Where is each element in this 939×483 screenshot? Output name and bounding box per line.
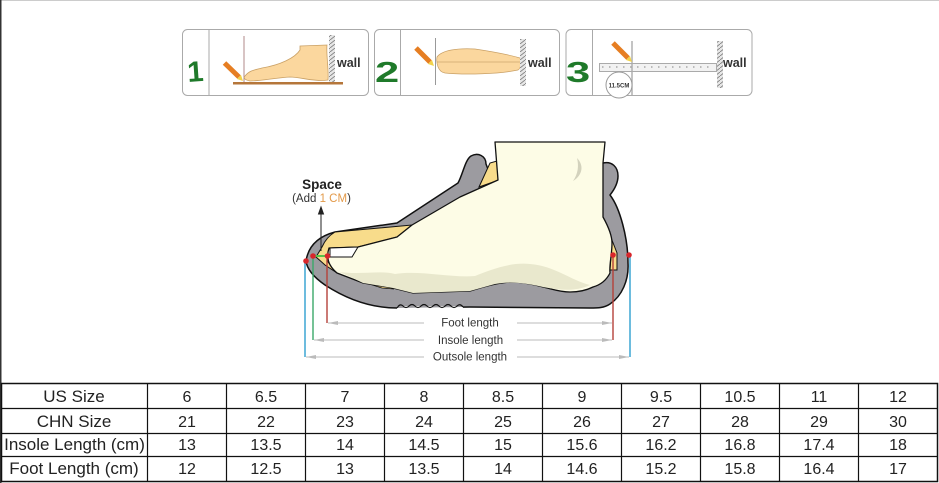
dimension: foot length: [328, 318, 612, 330]
dimension: insole length: Insole length: [438, 335, 503, 347]
row: US Size: 7: [341, 389, 350, 406]
icon: ruler: [600, 64, 716, 72]
row: Foot Length: 16.4: [803, 461, 835, 478]
dimension: outsole length: Outsole length: [433, 352, 507, 364]
row: US Size: 9: [578, 389, 587, 406]
row: Foot Length: 14: [494, 461, 512, 478]
row: CHN Size: 22: [257, 414, 275, 431]
row: CHN Size: 29: [810, 414, 828, 431]
row: US Size: 6: [183, 389, 192, 406]
row: US Size: 11: [811, 389, 827, 406]
label: wall: wall: [722, 56, 747, 70]
step number 1: 1: [186, 56, 205, 89]
size table: [1, 383, 938, 482]
row: US Size: 10.5: [724, 389, 756, 406]
row: Insole Length: Insole Length (cm): [4, 435, 145, 454]
row: Insole Length: 16.2: [645, 437, 677, 454]
step number 2: 2: [375, 56, 399, 88]
icon: wall hatch: [717, 41, 723, 88]
row: Foot Length: 15.8: [724, 461, 756, 478]
row: US Size: US Size: [43, 387, 105, 406]
row: Insole Length: 14: [336, 437, 354, 454]
yellow insole ball sliver: [366, 282, 394, 289]
row: US Size: 6.5: [255, 389, 277, 406]
ankle bone mark: [573, 158, 582, 181]
tongue padding: [479, 161, 499, 187]
label: Space: Space: [302, 177, 342, 192]
row: CHN Size: 26: [573, 414, 591, 431]
icon: top view foot: [437, 49, 521, 74]
label: Add 1 CM: (Add 1 CM): [292, 193, 351, 205]
row: CHN Size: 28: [731, 414, 749, 431]
row: CHN Size: CHN Size: [37, 412, 111, 431]
dimension: foot length: Foot length: [441, 318, 499, 330]
row: Foot Length: 13: [336, 461, 354, 478]
row: Foot Length: 14.6: [566, 461, 598, 478]
row: CHN Size: 24: [415, 414, 433, 431]
row: US Size: 12: [889, 389, 907, 406]
row: Foot Length: 17: [889, 461, 907, 478]
row: Insole Length: 16.8: [724, 437, 756, 454]
row: CHN Size: 27: [652, 414, 670, 431]
label: wall: wall: [336, 56, 361, 70]
row: Foot Length: Foot Length (cm): [9, 459, 139, 478]
shoe sole and upper: [306, 154, 628, 308]
heel padding: [603, 217, 617, 270]
row: CHN Size: 25: [494, 414, 512, 431]
row: US Size: 8: [420, 389, 429, 406]
row: CHN Size: 21: [178, 414, 196, 431]
step number 3: 3: [566, 56, 590, 88]
callout: 11.5CM: [606, 72, 632, 98]
panel: step 3 measure with ruler: [566, 30, 752, 98]
icon: pencil: [613, 43, 632, 62]
yellow insole: [316, 225, 412, 273]
dimension: outsole length: [306, 352, 629, 364]
foot: [328, 142, 612, 293]
sole shading: [340, 264, 590, 293]
panel: step 1 measure heel against wall: [182, 30, 368, 96]
diagram: foot inside shoe: [303, 142, 632, 357]
row: Insole Length: 18: [889, 437, 907, 454]
row: CHN Size: 30: [889, 414, 907, 431]
row: US Size: 8.5: [492, 389, 514, 406]
measurement lines: [305, 256, 630, 357]
space arrow: [318, 207, 324, 251]
row: Foot Length: 12.5: [250, 461, 282, 478]
panel: step 2 mark toe from above: [374, 30, 560, 96]
callout: 11.5CM: 11.5CM: [609, 84, 629, 90]
dimension: insole length: [314, 335, 612, 347]
row: Foot Length: 13.5: [408, 461, 440, 478]
row: Insole Length: 13: [178, 437, 196, 454]
icon: pencil: [224, 63, 243, 81]
row: CHN Size: 23: [336, 414, 354, 431]
icon: side view foot: [244, 45, 328, 81]
row: Insole Length: 15.6: [566, 437, 598, 454]
icon: wall hatch: [520, 39, 526, 86]
icon: pencil: [416, 48, 434, 66]
row: Insole Length: 14.5: [408, 437, 440, 454]
big toe gap: [330, 247, 358, 257]
tread notches: [397, 304, 463, 312]
row: Foot Length: 12: [178, 461, 196, 478]
measure points: [303, 252, 632, 264]
row: Foot Length: 15.2: [645, 461, 677, 478]
row: US Size: 9.5: [650, 389, 672, 406]
row: Insole Length: 13.5: [250, 437, 282, 454]
row: Insole Length: 17.4: [803, 437, 835, 454]
label: wall: wall: [527, 56, 552, 70]
icon: wall hatch: [329, 35, 335, 83]
row: Insole Length: 15: [494, 437, 512, 454]
